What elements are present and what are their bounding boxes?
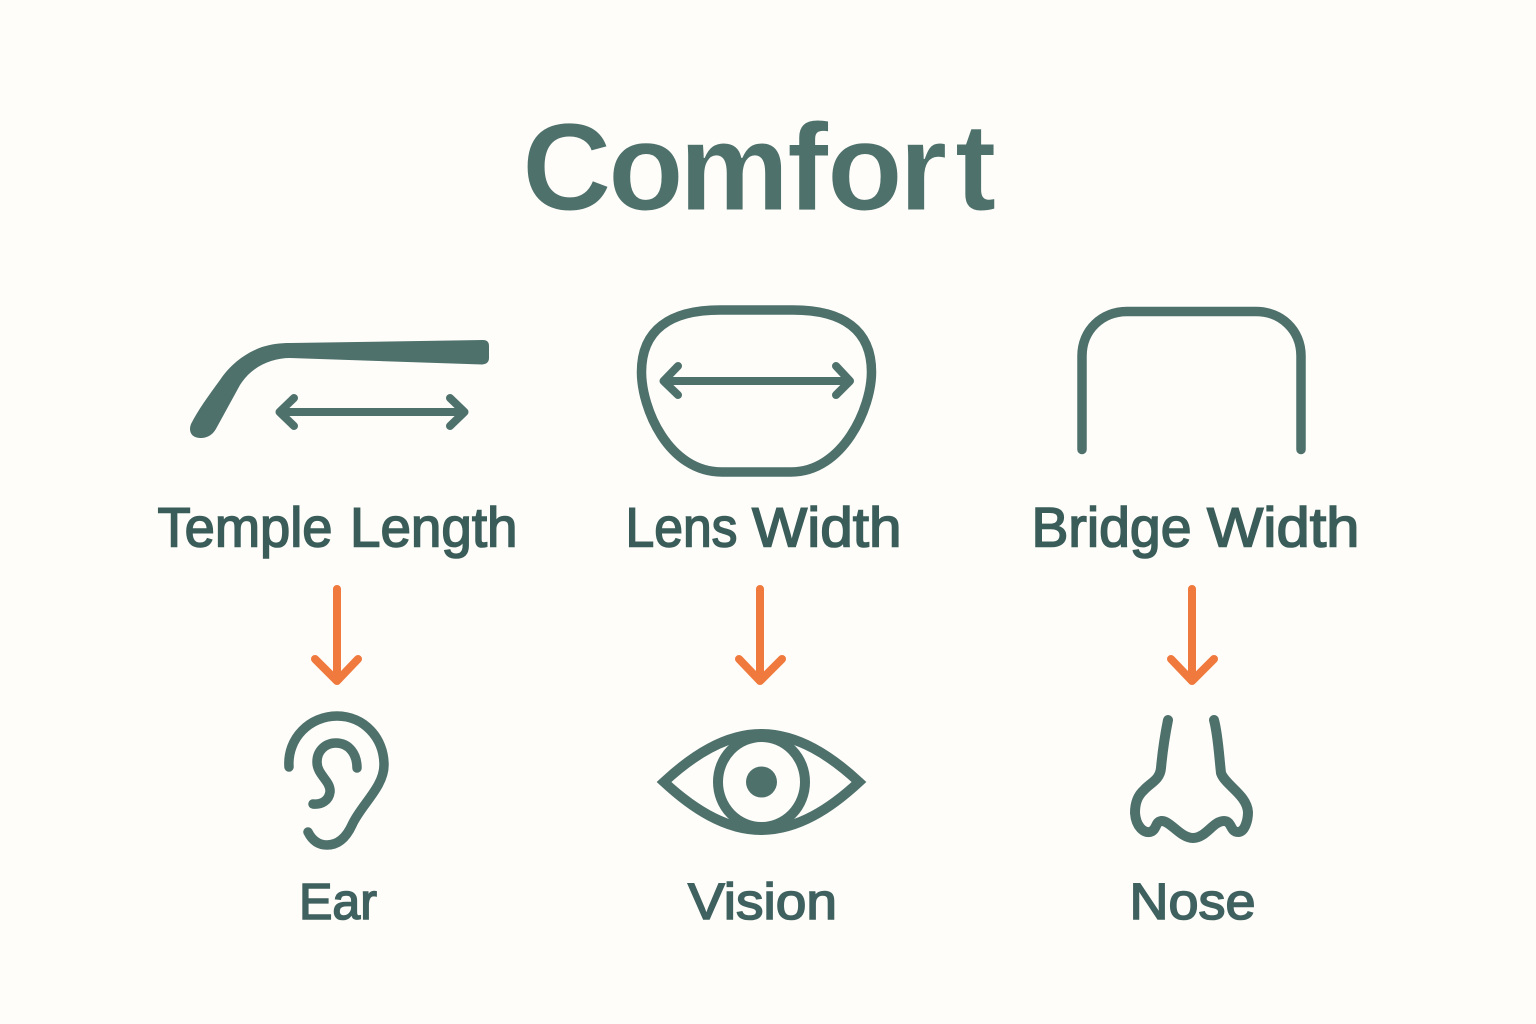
label: bridge width: Bridge [1032,496,1192,558]
label: temple length: Temple [158,496,332,558]
column: temple length [158,340,518,930]
icon: bridge [1082,312,1301,450]
column: bridge width [1032,312,1360,930]
column: lens width [626,310,902,930]
icon: lens [642,310,872,472]
label: lens width [626,496,902,558]
arrow: lens to vision [739,589,782,681]
title: Comfort [522,99,996,237]
label: lens width: Width [752,496,902,558]
label: bridge width [1032,496,1360,558]
label: ear: Ear [299,873,377,930]
label: vision: Vision [688,873,837,930]
arrow: bridge to nose [1171,589,1214,681]
icon: temple arm [190,340,489,438]
icon: ear [289,716,384,845]
label: lens width: Lens [626,496,738,558]
label: temple length: Length [350,496,518,558]
label: temple length [158,496,518,558]
arrow: temple to ear [315,589,358,681]
label: bridge width: Width [1207,496,1360,558]
icon: eye [664,734,859,830]
label: nose: Nose [1130,873,1256,930]
icon: nose [1135,720,1248,838]
